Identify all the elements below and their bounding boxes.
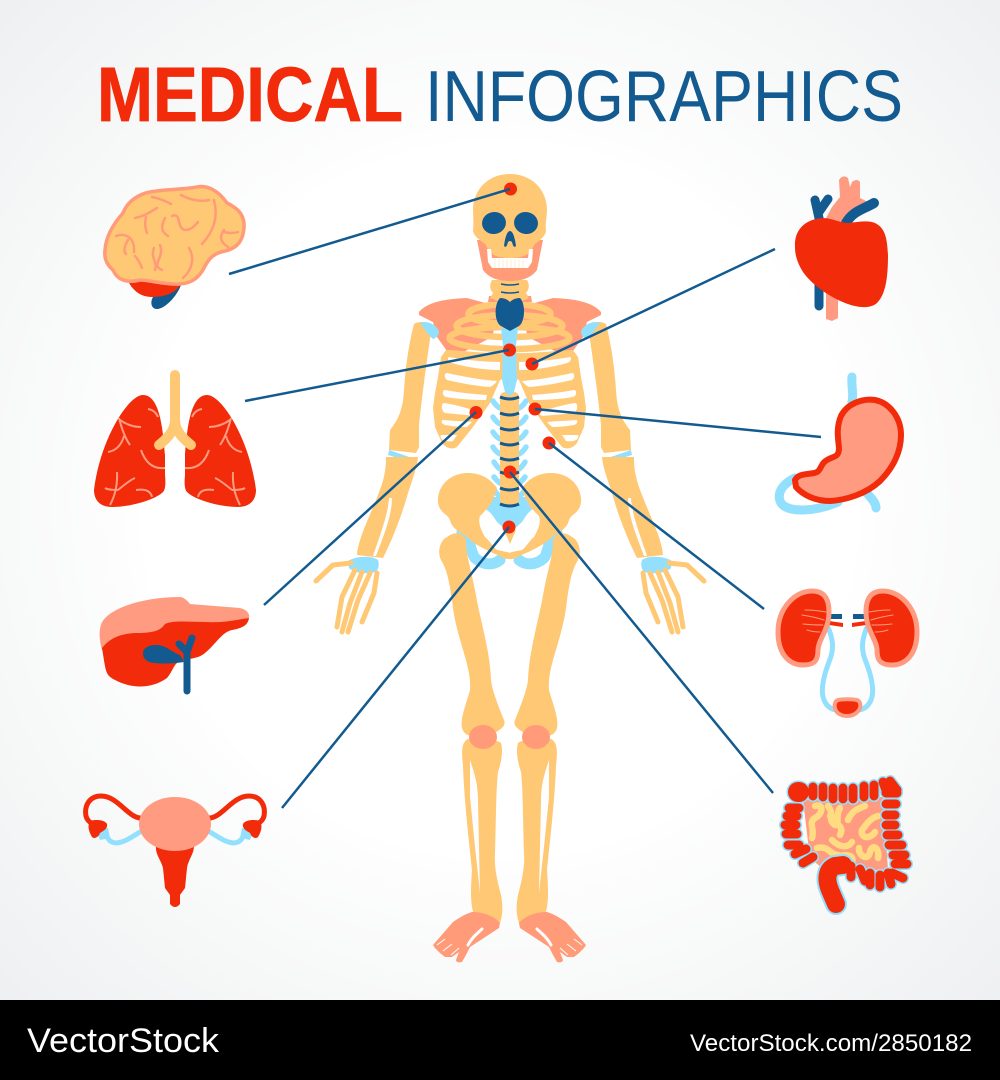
right arm: [581, 322, 704, 632]
liver pointer line: [264, 412, 476, 605]
hip bones: [438, 473, 581, 559]
lower rib cage right: [514, 350, 586, 448]
coccyx: [504, 530, 516, 544]
brain pointer line: [229, 189, 510, 274]
title: MEDICAL: [97, 52, 403, 138]
kidney pointer line: [549, 443, 764, 609]
icon: intestines: [785, 781, 907, 904]
footer bar: VectorStock: [27, 1022, 220, 1060]
footer bar: VectorStock.com/2850182: [690, 1030, 972, 1057]
icon: uterus: [86, 796, 264, 907]
scapulae: [419, 298, 601, 358]
intestine pointer line: [510, 472, 773, 793]
lungs pointer dot: [503, 344, 516, 356]
uterus pointer dot: [502, 520, 516, 534]
liver pointer dot: [470, 406, 482, 419]
eyes: [480, 210, 540, 247]
icon: lungs: [94, 375, 256, 507]
left leg: [433, 533, 505, 962]
sacrum: [485, 497, 533, 531]
brain pointer dot: [504, 182, 517, 196]
lungs pointer line: [245, 350, 509, 401]
skull: [473, 174, 547, 281]
heart pointer dot: [526, 358, 538, 370]
skeleton: [316, 174, 704, 962]
title: INFOGRAPHICS: [425, 57, 903, 137]
upper ribs: [450, 304, 570, 349]
kidney pointer dot: [542, 436, 556, 450]
intestine pointer dot: [504, 466, 516, 478]
neck vertebrae: [488, 280, 532, 302]
stomach pointer line: [535, 409, 821, 437]
heart pointer line: [532, 249, 775, 364]
uterus pointer line: [282, 527, 509, 808]
left arm: [316, 322, 439, 632]
teeth: [487, 249, 533, 268]
icon: stomach: [779, 377, 901, 510]
thyroid: [496, 298, 524, 331]
sternum: [501, 328, 518, 395]
spine: [500, 392, 519, 506]
icon: kidneys and bladder: [778, 591, 917, 716]
footer bar: [0, 1000, 1000, 1080]
right leg: [514, 533, 586, 962]
rib spine connectors: [493, 401, 526, 497]
icon: brain: [105, 187, 244, 309]
pointer lines: [229, 182, 821, 808]
pelvis ring: [462, 532, 557, 564]
stomach pointer dot: [528, 402, 542, 416]
title: [97, 52, 903, 138]
icon: liver: [100, 597, 249, 691]
icon: heart: [795, 176, 888, 321]
lower rib cage left: [433, 350, 505, 448]
